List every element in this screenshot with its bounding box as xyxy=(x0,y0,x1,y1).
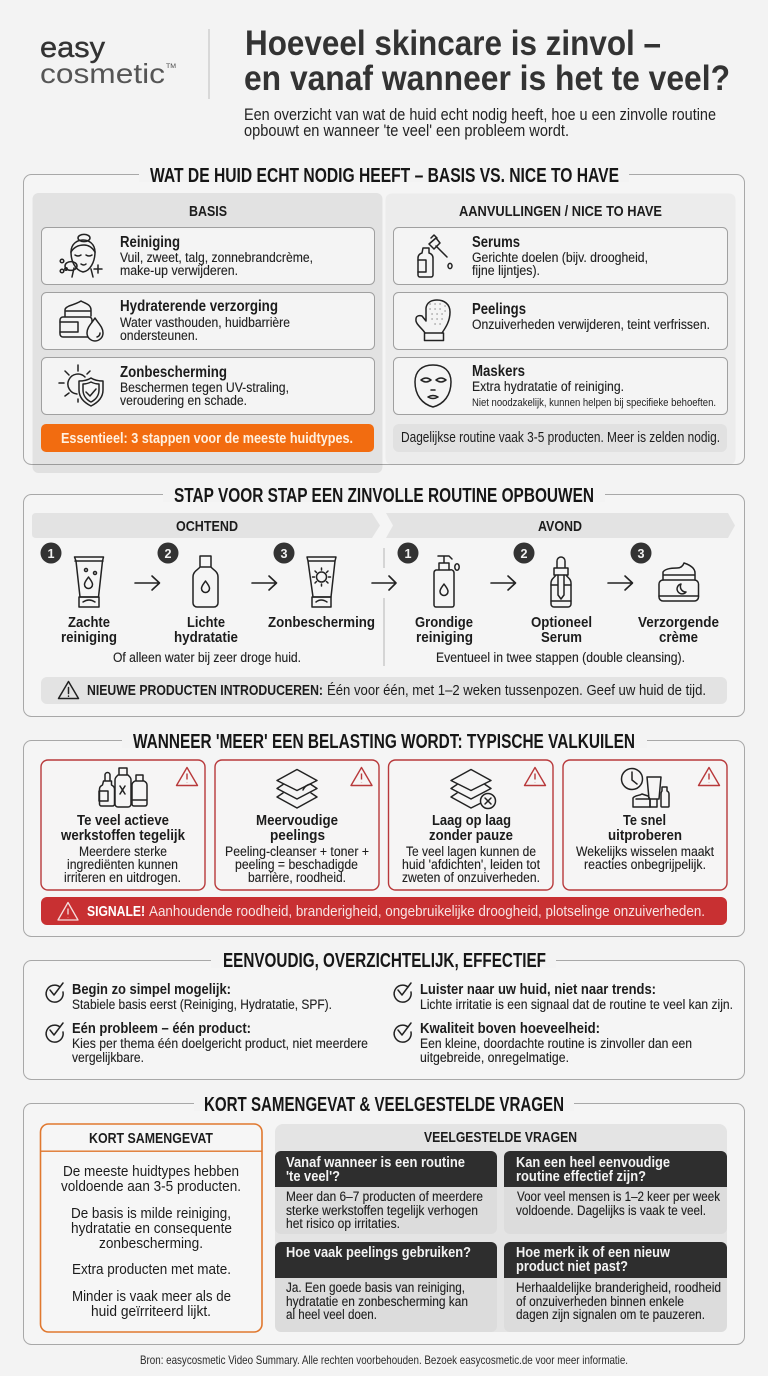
text: zonbescherming: Beschermen tegen UV-straling, xyxy=(120,380,289,395)
card: te veel actieve werkstoffen xyxy=(41,760,205,890)
text: Meerdere sterke xyxy=(79,844,167,859)
icon: serum dropper xyxy=(418,235,452,277)
step: zachte reiniging xyxy=(40,542,117,646)
card: zonbescherming xyxy=(42,358,374,414)
icon: peeling glove xyxy=(416,300,450,340)
faq: peelings: hydratatie en zonbescherming kan xyxy=(286,1294,468,1309)
label: Zonbescherming xyxy=(268,614,375,631)
text: zonbescherming: veroudering en schade. xyxy=(120,393,247,408)
icon: pump bottle xyxy=(434,556,459,607)
panel: kort samengevat xyxy=(40,1124,262,1332)
text: Een kleine, doordachte routine is zinvoller dan een xyxy=(420,1036,692,1051)
faq: peelings: Ja. Een goede basis van reiniging, xyxy=(286,1280,465,1295)
faq: vanaf wanneer: het risico op irritaties. xyxy=(286,1216,400,1231)
text xyxy=(420,981,733,1012)
card: hydraterende verzorging xyxy=(42,292,374,350)
faq: peelings: Hoe vaak peelings gebruiken? xyxy=(286,1244,471,1261)
text: uitgebreide, onregelmatige. xyxy=(420,1050,569,1065)
panel: typische valkuilen xyxy=(24,731,744,936)
badge 2: 2 xyxy=(164,546,172,561)
label: Optioneel xyxy=(531,614,592,631)
step: lichte hydratatie xyxy=(158,542,238,646)
text: Peeling-cleanser + toner + xyxy=(225,844,369,859)
card: laag op laag xyxy=(388,760,553,890)
icon: layers xyxy=(277,770,317,808)
icon: bottle xyxy=(193,556,218,607)
tip: een probleem xyxy=(46,1020,368,1065)
icon: three bottles xyxy=(99,768,147,807)
icon: tube with drops xyxy=(74,557,104,607)
text: peelings: Peelings xyxy=(472,301,526,318)
summary text: hydratatie en consequente xyxy=(71,1220,232,1237)
callout: nieuwe producten: NIEUWE PRODUCTEN INTRODUCEREN: xyxy=(87,682,323,699)
icon: sun and shield xyxy=(59,365,103,406)
step: optioneel serum xyxy=(514,542,592,646)
icon: warning xyxy=(698,768,720,786)
label xyxy=(531,614,592,646)
faq: vanaf wanneer xyxy=(275,1151,497,1234)
banner: avond: AVOND xyxy=(538,518,582,535)
note: avond: Eventueel in twee stappen (double cleansing). xyxy=(436,650,685,665)
tip: kwaliteit boven hoeveelheid xyxy=(394,1020,692,1065)
text xyxy=(225,812,369,885)
icon: layers with x xyxy=(451,770,496,808)
callout: dagelijkse routine xyxy=(393,424,727,452)
text: Lichte irritatie is een signaal dat de routine te veel kan zijn. xyxy=(420,997,733,1012)
faq: nieuw product: dagen zijn signalen om te pauzeren. xyxy=(516,1307,705,1322)
text: huid 'afdichten', leiden tot xyxy=(402,857,540,872)
text: maskers xyxy=(472,363,716,409)
text xyxy=(420,1020,692,1065)
text: peelings xyxy=(270,827,325,844)
title: en vanaf wanneer is het te veel? xyxy=(244,59,730,98)
faq: peelings: al heel veel doen. xyxy=(286,1307,377,1322)
panel: stap voor stap xyxy=(24,485,744,716)
arrow xyxy=(608,576,632,590)
title xyxy=(244,24,730,98)
panel: wat de huid echt nodig heeft xyxy=(24,165,744,473)
subtitle: Een overzicht van wat de huid echt nodig heeft, hoe u een zinvolle routine xyxy=(244,106,716,124)
logo: easy cosmetic xyxy=(40,32,176,89)
text: zweten of onzuiverheden. xyxy=(402,870,540,885)
label: reiniging xyxy=(61,629,117,646)
logo: easy cosmetic: easy xyxy=(40,32,106,64)
icon: clock and products xyxy=(622,768,669,807)
card: maskers xyxy=(394,358,728,414)
card: serums xyxy=(394,228,728,284)
summary text: Extra producten met mate. xyxy=(72,1261,231,1278)
text xyxy=(60,812,186,885)
icon: cream jar and drop xyxy=(60,301,103,341)
icon: warning xyxy=(58,682,78,698)
logo: easy cosmetic: cosmetic xyxy=(40,58,165,89)
text: peelings: Onzuiverheden verwijderen, teint verfrissen. xyxy=(472,317,710,332)
badge 1: 1 xyxy=(48,546,54,561)
text: uitproberen xyxy=(608,827,682,844)
callout: signale: SIGNALE! xyxy=(87,903,145,920)
banner: ochtend: OCHTEND xyxy=(176,518,238,535)
heading: section 1: WAT DE HUID ECHT NODIG HEEFT – BASIS VS. NICE TO HAVE xyxy=(150,165,619,187)
text xyxy=(72,981,332,1012)
faq: nieuw product: Herhaaldelijke branderigheid, roodheid xyxy=(516,1280,721,1295)
text: maskers: Extra hydratatie of reiniging. xyxy=(472,379,624,394)
icon: check xyxy=(46,1023,63,1042)
label xyxy=(638,614,719,646)
text: Te veel lagen kunnen de xyxy=(406,844,536,859)
label: Lichte xyxy=(187,614,225,631)
arrow xyxy=(252,576,276,590)
panel: samenvatting en vragen xyxy=(24,1094,744,1344)
label xyxy=(174,614,238,646)
label: crème xyxy=(659,629,698,646)
summary text: De meeste huidtypes hebben xyxy=(63,1163,239,1180)
text: serums xyxy=(472,234,648,278)
faq: eenvoudige routine: Voor veel mensen is 1–2 keer per week xyxy=(517,1189,720,1204)
callout: essentieel xyxy=(41,424,374,452)
summary text: De basis is milde reiniging, xyxy=(71,1205,231,1222)
heading: basis: BASIS xyxy=(189,203,227,220)
text: maskers: Niet noodzakelijk, kunnen helpen bij specifieke behoeften. xyxy=(472,397,716,409)
panel: aanvullingen xyxy=(386,194,736,464)
faq: peelings xyxy=(275,1242,497,1332)
subtitle xyxy=(244,106,716,140)
card: peelings xyxy=(394,292,728,350)
text: Laag op laag xyxy=(432,812,511,829)
text: peeling = beschadigde xyxy=(235,857,358,872)
title: Hoeveel skincare is zinvol – xyxy=(245,24,661,63)
icon: check xyxy=(46,983,63,1002)
icon: night cream jar xyxy=(659,563,698,601)
panel: veelgestelde vragen xyxy=(275,1124,727,1332)
header xyxy=(40,24,730,140)
text: zonbescherming xyxy=(120,364,289,408)
icon: sunscreen tube xyxy=(307,557,336,607)
badge 3: 3 xyxy=(638,546,644,561)
step: grondige reiniging xyxy=(398,542,473,646)
label: Zachte xyxy=(68,614,110,631)
text: irriteren en uitdrogen. xyxy=(64,870,181,885)
faq: eenvoudige routine: Kan een heel eenvoudige xyxy=(516,1154,670,1171)
faq: eenvoudige routine xyxy=(504,1151,727,1234)
faq: vanaf wanneer: Vanaf wanneer is een routine xyxy=(286,1154,465,1171)
icon: check xyxy=(394,1023,411,1042)
card: te snel uitproberen xyxy=(563,760,727,890)
summary text: zonbescherming. xyxy=(99,1235,203,1252)
panel: eenvoudig overzichtelijk effectief xyxy=(24,950,744,1080)
logo: easy cosmetic: TM xyxy=(166,64,176,70)
text: reacties onbegrijpelijk. xyxy=(584,857,706,872)
label xyxy=(415,614,473,646)
summary text xyxy=(61,1163,241,1320)
tip: begin simpel xyxy=(46,981,332,1012)
heading: KORT SAMENGEVAT xyxy=(89,1130,213,1147)
badge 1: 1 xyxy=(404,546,412,561)
text xyxy=(72,1020,368,1065)
banner: avond xyxy=(386,513,735,538)
faq: nieuw product xyxy=(504,1242,727,1332)
text: reiniging: Vuil, zweet, talg, zonnebrandcrème, xyxy=(120,250,313,265)
label: hydratatie xyxy=(174,629,238,646)
text: hydratatie xyxy=(120,298,290,343)
icon: sheet mask xyxy=(415,365,451,407)
arrow xyxy=(135,576,160,590)
icon: serum bottle xyxy=(551,557,571,607)
card: reiniging xyxy=(42,228,374,284)
text: serums: Gerichte doelen (bijv. droogheid, xyxy=(472,250,648,265)
faq: nieuw product: of onzuiverheden binnen enkele xyxy=(516,1294,684,1309)
text: Kwaliteit boven hoeveelheid: xyxy=(420,1020,600,1037)
faq: eenvoudige routine: voldoende. Dagelijks is vaak te veel. xyxy=(516,1203,706,1218)
text: Wekelijks wisselen maakt xyxy=(576,844,714,859)
badge 3: 3 xyxy=(280,546,288,561)
faq: vanaf wanneer: sterke werkstoffen tegelijk verhogen xyxy=(286,1203,478,1218)
text: hydratatie: Water vasthouden, huidbarrière xyxy=(120,315,290,330)
subtitle: opbouwt en wanneer 'te veel' een probleem wordt. xyxy=(244,122,569,140)
text: zonder pauze xyxy=(429,827,513,844)
text: Eén probleem – één product: xyxy=(72,1020,251,1037)
heading: VEELGESTELDE VRAGEN xyxy=(424,1129,577,1146)
summary text: voldoende aan 3-5 producten. xyxy=(61,1178,241,1195)
summary text: Minder is vaak meer als de xyxy=(72,1288,231,1305)
arrow xyxy=(491,576,516,590)
text xyxy=(576,812,714,872)
text: Kies per thema één doelgericht product, niet meerdere xyxy=(72,1036,368,1051)
text: zonbescherming: Zonbescherming xyxy=(120,364,227,381)
text: Stabiele basis eerst (Reiniging, Hydratatie, SPF). xyxy=(72,997,332,1012)
text: serums: Serums xyxy=(472,234,520,251)
text: ingrediënten kunnen xyxy=(67,857,178,872)
note: ochtend: Of alleen water bij zeer droge huid. xyxy=(113,650,301,665)
step: zonbescherming xyxy=(268,542,375,631)
footer: Bron: easycosmetic Video Summary. Alle rechten voorbehouden. Bezoek easycosmetic.de voor meer informatie. xyxy=(140,1353,628,1367)
faq: nieuw product: product niet past? xyxy=(516,1258,628,1275)
label xyxy=(61,614,117,646)
heading: section 4: EENVOUDIG, OVERZICHTELIJK, EFFECTIEF xyxy=(223,950,546,972)
callout: essentieel: Essentieel: 3 stappen voor de meeste huidtypes. xyxy=(61,430,353,447)
faq: eenvoudige routine: routine effectief zijn? xyxy=(516,1168,646,1185)
arrow: ochtend to avond xyxy=(372,576,396,590)
text: maskers: Maskers xyxy=(472,363,525,380)
text: Te snel xyxy=(623,812,666,829)
text: reiniging: make-up verwijderen. xyxy=(120,263,238,278)
banner: ochtend xyxy=(32,513,380,538)
text: Begin zo simpel mogelijk: xyxy=(72,981,231,998)
icon: warning xyxy=(524,768,546,786)
summary text: huid geïrriteerd lijkt. xyxy=(91,1303,211,1320)
icon: warning xyxy=(351,768,372,786)
text: barrière, roodheid. xyxy=(248,870,346,885)
icon: face xyxy=(60,234,102,277)
callout: nieuwe producten: Één voor één, met 1–2 weken tussenpozen. Geef uw huid de tijd. xyxy=(327,682,706,699)
text: werkstoffen tegelijk xyxy=(60,827,186,844)
callout: signale xyxy=(41,897,727,925)
text: hydratatie: ondersteunen. xyxy=(120,328,198,343)
heading: section 3: WANNEER 'MEER' EEN BELASTING WORDT: TYPISCHE VALKUILEN xyxy=(133,731,635,753)
label: Verzorgende xyxy=(638,614,719,631)
text: reiniging: Reiniging xyxy=(120,234,180,251)
badge 2: 2 xyxy=(520,546,528,561)
text: Meervoudige xyxy=(256,812,338,829)
text: Te veel actieve xyxy=(77,812,169,829)
heading: section 5: KORT SAMENGEVAT & VEELGESTELDE VRAGEN xyxy=(204,1094,564,1116)
heading: section 2: STAP VOOR STAP EEN ZINVOLLE ROUTINE OPBOUWEN xyxy=(174,485,594,507)
text: vergelijkbare. xyxy=(72,1050,144,1065)
callout: nieuwe producten xyxy=(41,677,727,704)
icon: warning xyxy=(176,768,198,786)
text xyxy=(402,812,540,885)
label: Serum xyxy=(541,629,582,646)
text: reiniging xyxy=(120,234,313,278)
icon: warning white xyxy=(58,902,78,920)
text: Luister naar uw huid, niet naar trends: xyxy=(420,981,656,998)
text: serums: fijne lijntjes). xyxy=(472,263,540,278)
faq: nieuw product: Hoe merk ik of een nieuw xyxy=(516,1244,670,1261)
text: hydratatie: Hydraterende verzorging xyxy=(120,298,278,315)
label: reiniging xyxy=(416,629,473,646)
heading: aanvullingen: AANVULLINGEN / NICE TO HAVE xyxy=(459,203,662,220)
faq: vanaf wanneer: 'te veel'? xyxy=(286,1168,340,1185)
faq: vanaf wanneer: Meer dan 6–7 producten of meerdere xyxy=(286,1189,483,1204)
panel: basis xyxy=(32,193,382,473)
icon: check xyxy=(394,983,411,1002)
tip: luister naar uw huid xyxy=(394,981,733,1012)
text: peelings xyxy=(472,301,710,332)
label: Grondige xyxy=(415,614,473,631)
card: meervoudige peelings xyxy=(215,760,379,890)
callout: signale: Aanhoudende roodheid, branderigheid, ongebruikelijke droogheid, plotselinge onzuiverheden. xyxy=(149,903,705,920)
step: verzorgende creme xyxy=(630,542,719,646)
